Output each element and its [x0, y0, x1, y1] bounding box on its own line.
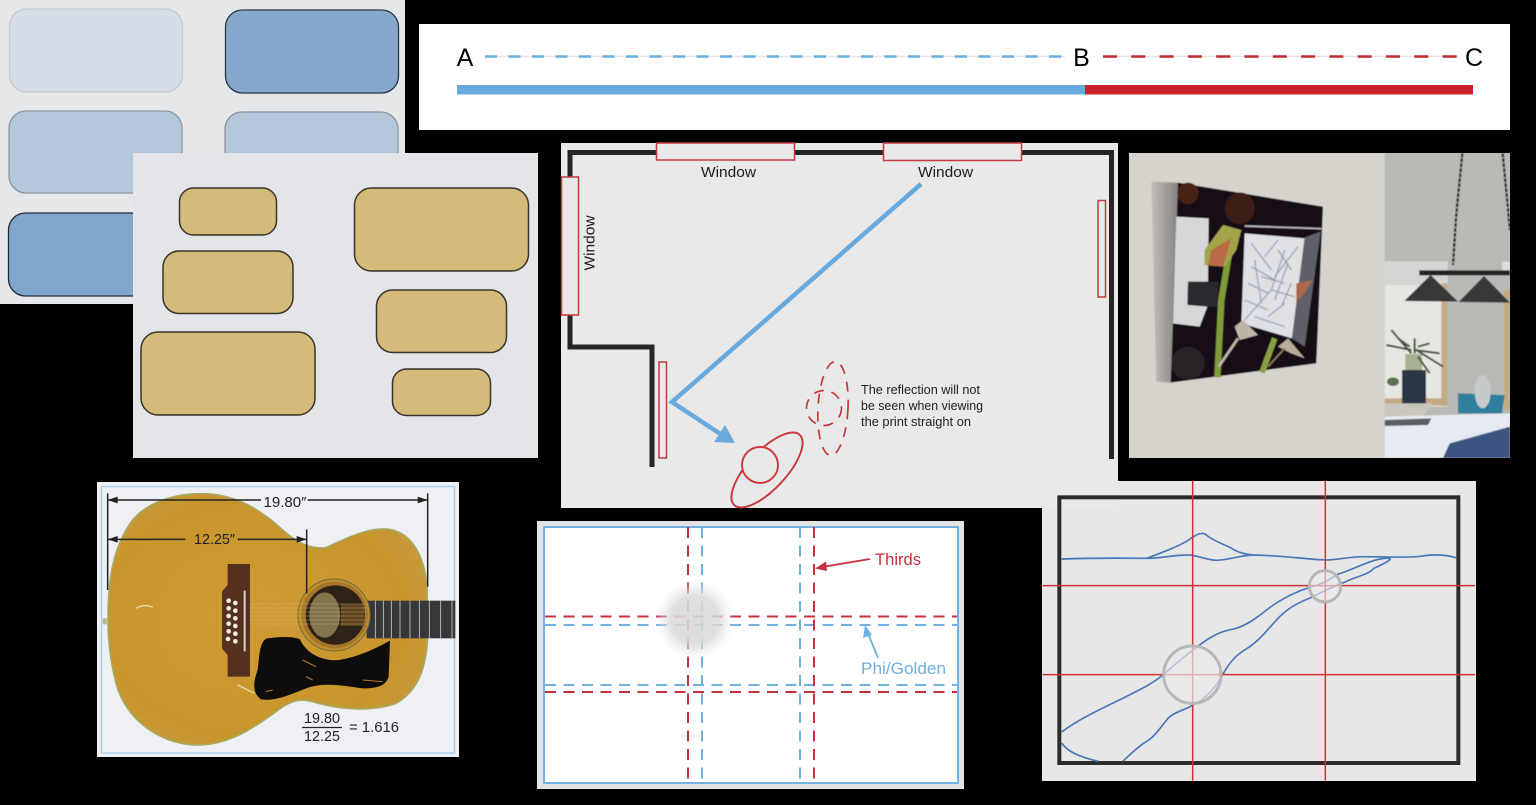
window top left: [656, 143, 794, 160]
panel: lower right background: [1042, 481, 1476, 781]
box: pale blue top left: [10, 9, 182, 92]
dashed segment B to C: [1103, 56, 1458, 58]
red thirds lines: [1043, 481, 1475, 781]
end pin: [103, 618, 107, 624]
solid red bar: [1085, 85, 1473, 94]
thirds label: Thirds: [875, 551, 921, 569]
room walls top and right: [570, 152, 1112, 459]
bridge: [222, 564, 250, 677]
fretboard: [367, 601, 455, 638]
panel: guitar golden ratio: [97, 482, 459, 757]
reflection note: be seen when viewing: [861, 399, 983, 413]
viewer at angle: [720, 422, 814, 518]
horizon line: [1062, 555, 1457, 560]
reflected window side band: [1292, 232, 1321, 347]
pickguard: [254, 637, 390, 700]
dimension arrowheads: [108, 497, 428, 543]
viewer straight on, dashed: [806, 361, 850, 456]
blue chair: [1458, 393, 1505, 413]
photo: glossy print on wall with reflections: [1128, 150, 1513, 460]
branch lower edge: [1062, 559, 1391, 761]
sound hole: [298, 579, 370, 651]
room background right: [1385, 150, 1513, 460]
lower reflected furniture: [1171, 347, 1205, 380]
focus circle small: [1309, 571, 1341, 602]
reflection note: [861, 383, 983, 429]
fraction formula: 19.80: [304, 711, 340, 727]
dark blobs top: [1177, 183, 1199, 204]
box: tan 5: [141, 332, 315, 415]
panel: landscape sketch with thirds grid: [1043, 481, 1475, 781]
lamp shades: [1404, 275, 1458, 302]
phi grid lines: [545, 527, 957, 782]
room walls: [570, 315, 652, 467]
print shadow: [1151, 182, 1178, 383]
box: tan 4: [376, 290, 506, 352]
white frame with blue border: [544, 527, 958, 783]
dimension label 19.80: 19.80″: [264, 494, 307, 511]
panel: blue rounded rectangles: [0, 0, 405, 304]
print: [1171, 183, 1323, 383]
phi label: Phi/Golden: [861, 660, 946, 678]
mountain outline: [1147, 533, 1253, 558]
box: tan 2: [354, 188, 528, 271]
fraction formula: 12.25: [304, 729, 340, 745]
lamp bar: [1419, 270, 1510, 275]
reflection note: the print straight on: [861, 415, 971, 429]
potted plant: [1402, 370, 1426, 404]
reflection note: The reflection will not: [861, 383, 981, 397]
label C: C: [1465, 44, 1483, 72]
wall left: [1128, 150, 1385, 460]
panel: tan rounded rectangles: [133, 153, 538, 458]
reflected window main: [1241, 233, 1305, 338]
guitar illustration: [103, 493, 455, 745]
box: mid blue middle left: [9, 111, 182, 193]
strings: [244, 604, 368, 624]
inner border: [102, 486, 454, 753]
box: tan 1: [180, 188, 276, 235]
box: mid blue middle right: [225, 112, 398, 194]
thirds grid lines: [545, 527, 957, 782]
print on right wall: [1098, 200, 1106, 297]
cushion: [1385, 403, 1433, 417]
window label top left: Window: [701, 165, 757, 181]
black frame: [1059, 497, 1458, 763]
window label left: Window: [582, 215, 598, 270]
window label top right: Window: [918, 165, 974, 181]
panel: thirds vs phi grid: [537, 521, 964, 789]
plant stem left: [1217, 237, 1232, 377]
guitar body: [108, 494, 428, 745]
phi arrow: [863, 625, 878, 658]
plant stem right: [1262, 338, 1275, 373]
box: tan 6: [392, 369, 490, 416]
table: [1385, 413, 1510, 458]
pale scratch: [136, 606, 254, 693]
dashed segment A to B: [485, 56, 1065, 58]
dimension label 12.25: 12.25″: [194, 531, 236, 548]
fraction formula: [302, 711, 399, 745]
thirds arrow: [815, 559, 870, 571]
window right room: [1385, 262, 1447, 407]
leaves: [1205, 225, 1241, 267]
window left: [562, 177, 578, 315]
solid blue bar: [457, 85, 1085, 94]
branch upper edge: [1062, 558, 1391, 732]
focus circle large: [1164, 646, 1221, 703]
fraction formula: = 1.616: [349, 720, 399, 736]
hanging chains: [1453, 153, 1462, 265]
dimension lines: [108, 493, 428, 593]
print on left wall: [659, 362, 666, 458]
panel: room floor plan: [561, 143, 1118, 518]
panel: A B C ratio line: [419, 24, 1510, 130]
label A: A: [457, 44, 474, 72]
box: dark blue top right: [226, 10, 398, 93]
soft focal spot: [655, 580, 735, 660]
branches in reflection: [1245, 240, 1298, 327]
label B: B: [1073, 44, 1090, 72]
window top right: [884, 143, 1022, 160]
box: tan 3: [163, 251, 293, 314]
reflected window left: [1173, 217, 1209, 327]
reflected light ray arrow: [672, 184, 921, 443]
box: dark blue bottom left: [8, 213, 182, 296]
